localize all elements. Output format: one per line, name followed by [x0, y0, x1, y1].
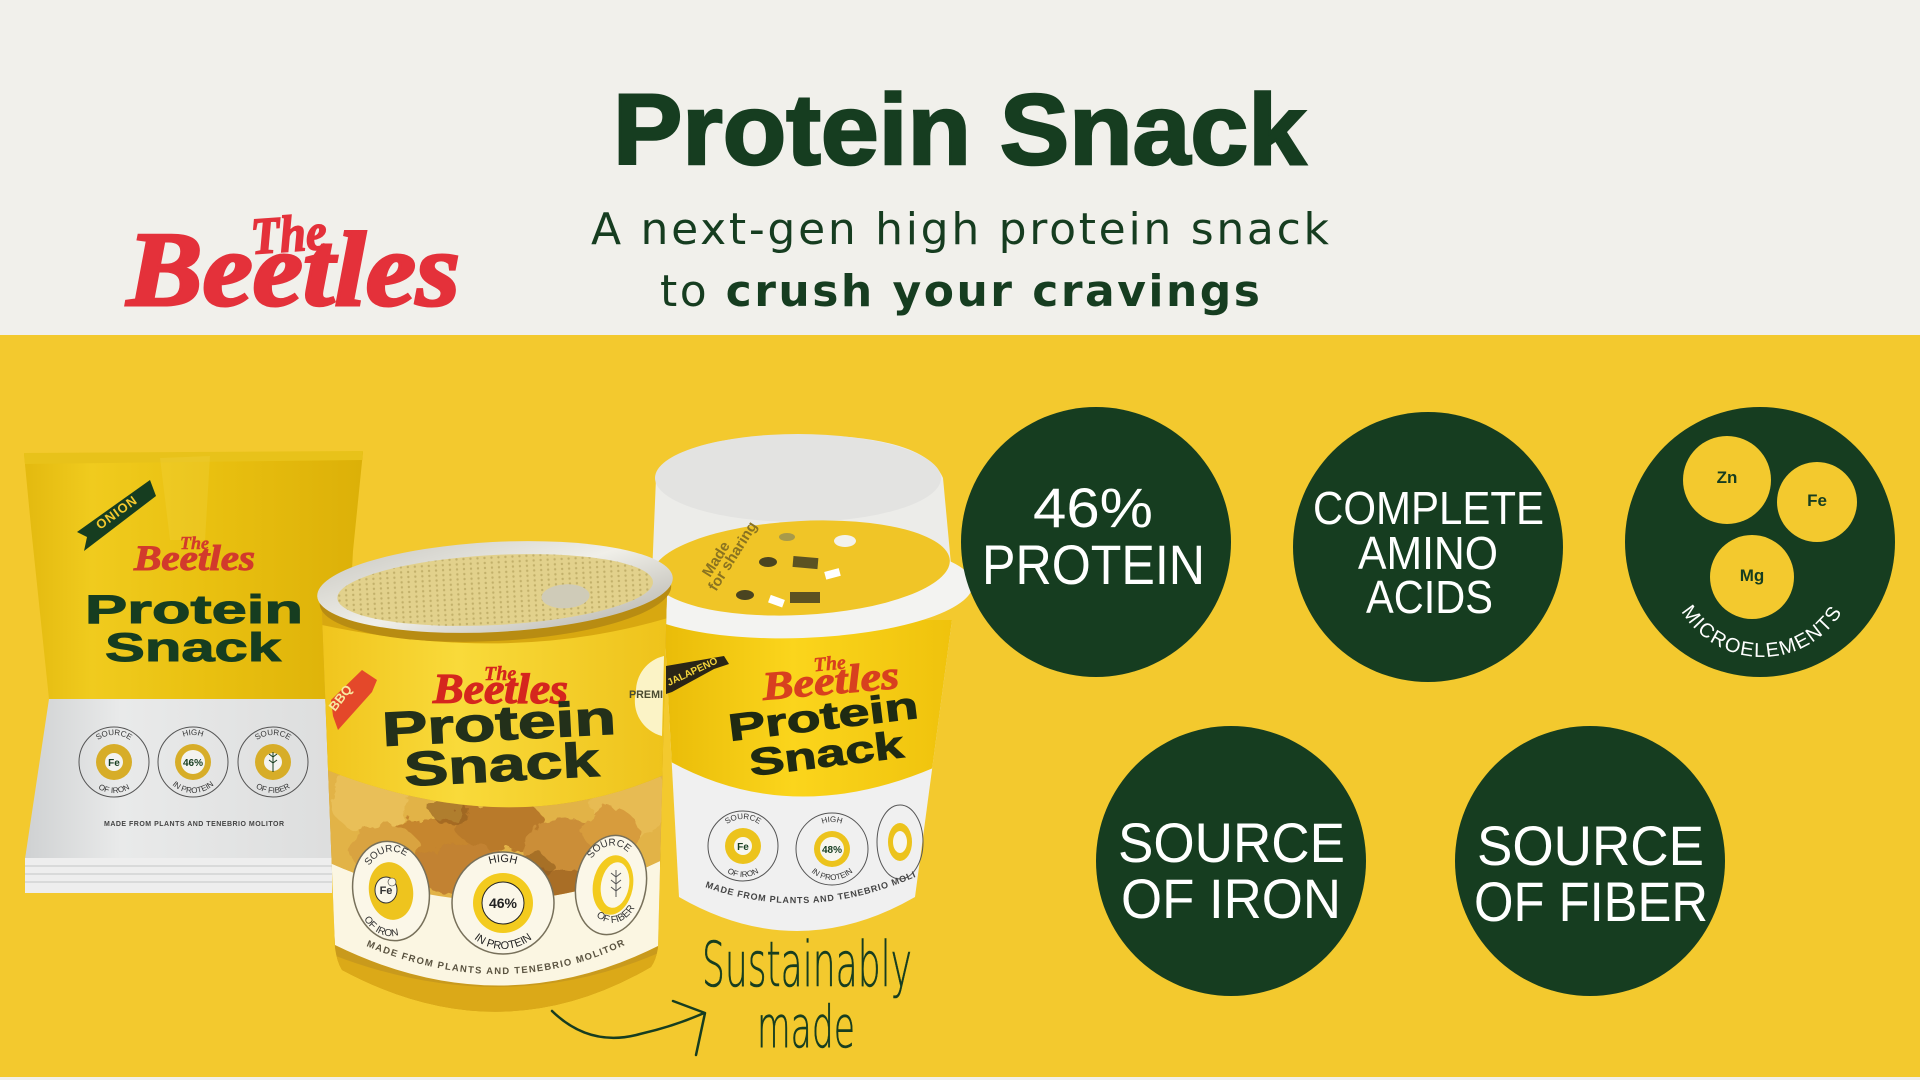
pouch badge: protein: 46% [183, 758, 203, 769]
pouch brand: Beetles [133, 538, 255, 578]
cup badge: protein [796, 812, 868, 886]
cup seal: Made [699, 539, 734, 580]
pouch badge: protein: IN PROTEIN [172, 781, 214, 793]
pouch badge: iron: OF IRON [99, 784, 130, 794]
can lid [315, 533, 676, 650]
can badge: fiber: SOURCE [587, 838, 632, 858]
subtitle: to crush your cravings [660, 266, 1260, 317]
cup product name: Snack [747, 724, 907, 785]
subtitle: A next-gen high protein snack [591, 204, 1330, 255]
can badge: protein [451, 851, 555, 955]
subtitle [591, 204, 1330, 317]
element: iron: Fe [1807, 491, 1827, 510]
circle: complete amino acids: ACIDS [1366, 571, 1493, 623]
cup product name: Protein [726, 685, 921, 750]
can brand: The [484, 663, 516, 685]
circle: 46% protein: 46% [1033, 476, 1153, 539]
circle: 46% protein: PROTEIN [982, 533, 1205, 596]
cup badge: protein: IN PROTEIN [812, 868, 852, 880]
cup brand: The [813, 652, 847, 676]
pouch footnote: MADE FROM PLANTS AND TENEBRIO MOLITOR [104, 821, 284, 828]
pouch badge: fiber: OF FIBER [256, 784, 290, 793]
circle: source of fiber: SOURCE [1477, 814, 1704, 877]
logo: The Beetles: Beetles [126, 211, 460, 328]
element: zinc: Zn [1717, 468, 1737, 487]
curved label: MICROELEMENTS [1682, 604, 1840, 657]
ribbon: jalapeno: JALAPENO [666, 656, 720, 689]
header band [0, 0, 1920, 335]
logo: The Beetles: The [249, 204, 329, 266]
ribbon: onion [77, 480, 156, 551]
circle: source of fiber: OF FIBER [1474, 870, 1708, 933]
pouch brand: The [180, 533, 209, 553]
ribbon: bbq: BBQ [326, 682, 355, 714]
title: Protein Snack [613, 74, 1306, 186]
pouch product name: Snack [105, 626, 282, 670]
element: zinc [1683, 436, 1771, 524]
circle: source of iron [1096, 726, 1366, 996]
can footnote: MADE FROM PLANTS AND TENEBRIO MOLITOR [366, 940, 625, 974]
pouch product name [85, 588, 303, 670]
cup seal [650, 513, 952, 623]
pouch badge: fiber: SOURCE [255, 729, 292, 740]
can product name: Snack [403, 734, 601, 797]
handwritten note: made [757, 993, 855, 1061]
cup lid dome [652, 435, 952, 575]
ribbon: bbq [326, 670, 377, 730]
can badge: protein: 46% [489, 895, 518, 911]
circle: complete amino acids [1293, 412, 1563, 682]
can food window [328, 770, 662, 898]
handwritten note [702, 928, 912, 1061]
cup badge: fiber [877, 805, 923, 879]
pouch product name: Protein [85, 588, 303, 632]
pouch badge: iron: Fe [108, 758, 120, 769]
pouch badge: fiber [238, 726, 308, 798]
cup footnote: MADE FROM PLANTS AND TENEBRIO MOLI [706, 871, 916, 904]
cup badge: protein: HIGH [822, 816, 842, 824]
seal: premium [629, 656, 664, 736]
circle: source of iron: SOURCE [1118, 811, 1345, 874]
cup seal: for sharing [705, 519, 761, 594]
can badge: fiber: OF FIBER [598, 905, 634, 923]
cup brand: Beetles [759, 652, 901, 709]
product: pouch [24, 451, 363, 893]
yellow panel [0, 335, 1920, 1077]
element: magnesium: Mg [1740, 566, 1764, 585]
can badge: iron: SOURCE [364, 844, 408, 865]
cup badge: iron [708, 810, 778, 882]
can label [316, 590, 672, 807]
element: iron [1777, 462, 1857, 542]
product: can [317, 541, 673, 1012]
cup badge: protein: 48% [822, 845, 842, 856]
element: magnesium [1710, 535, 1794, 619]
can badge: iron [352, 840, 430, 942]
can product name [381, 692, 617, 797]
product: cup [652, 434, 971, 931]
circle: complete amino acids: COMPLETE [1313, 482, 1544, 534]
pouch body [24, 452, 363, 699]
can body [322, 596, 667, 1012]
arrow [552, 1001, 705, 1055]
cup product name [726, 685, 921, 785]
can badge: protein: HIGH [488, 854, 518, 864]
pouch badge: protein: HIGH [182, 729, 204, 736]
can badge: iron: Fe [380, 885, 392, 897]
cup badge: iron: OF IRON [728, 868, 758, 878]
seal: premium: PREMI [629, 689, 663, 701]
can brand: Beetles [432, 667, 568, 713]
can badge: protein: IN PROTEIN [474, 933, 532, 950]
ribbon: onion: ONION [93, 492, 140, 532]
cup badge: iron: SOURCE [725, 813, 762, 824]
circle: microelements [1625, 407, 1895, 677]
cup badge: iron: Fe [737, 842, 749, 853]
can badge: fiber [574, 834, 648, 936]
can badge: iron: OF IRON [365, 916, 398, 936]
can product name: Protein [381, 692, 617, 757]
circle: source of fiber [1455, 726, 1725, 996]
circle: 46% protein [961, 407, 1231, 677]
cup rim [627, 536, 975, 644]
circle: complete amino acids: AMINO [1358, 527, 1498, 579]
handwritten note: Sustainably [702, 928, 912, 1001]
pouch badge: iron [78, 726, 150, 798]
pouch badge: protein [158, 726, 228, 798]
circle: source of iron: OF IRON [1121, 867, 1341, 930]
pouch badge: iron: SOURCE [96, 729, 132, 740]
cup body [666, 620, 952, 931]
